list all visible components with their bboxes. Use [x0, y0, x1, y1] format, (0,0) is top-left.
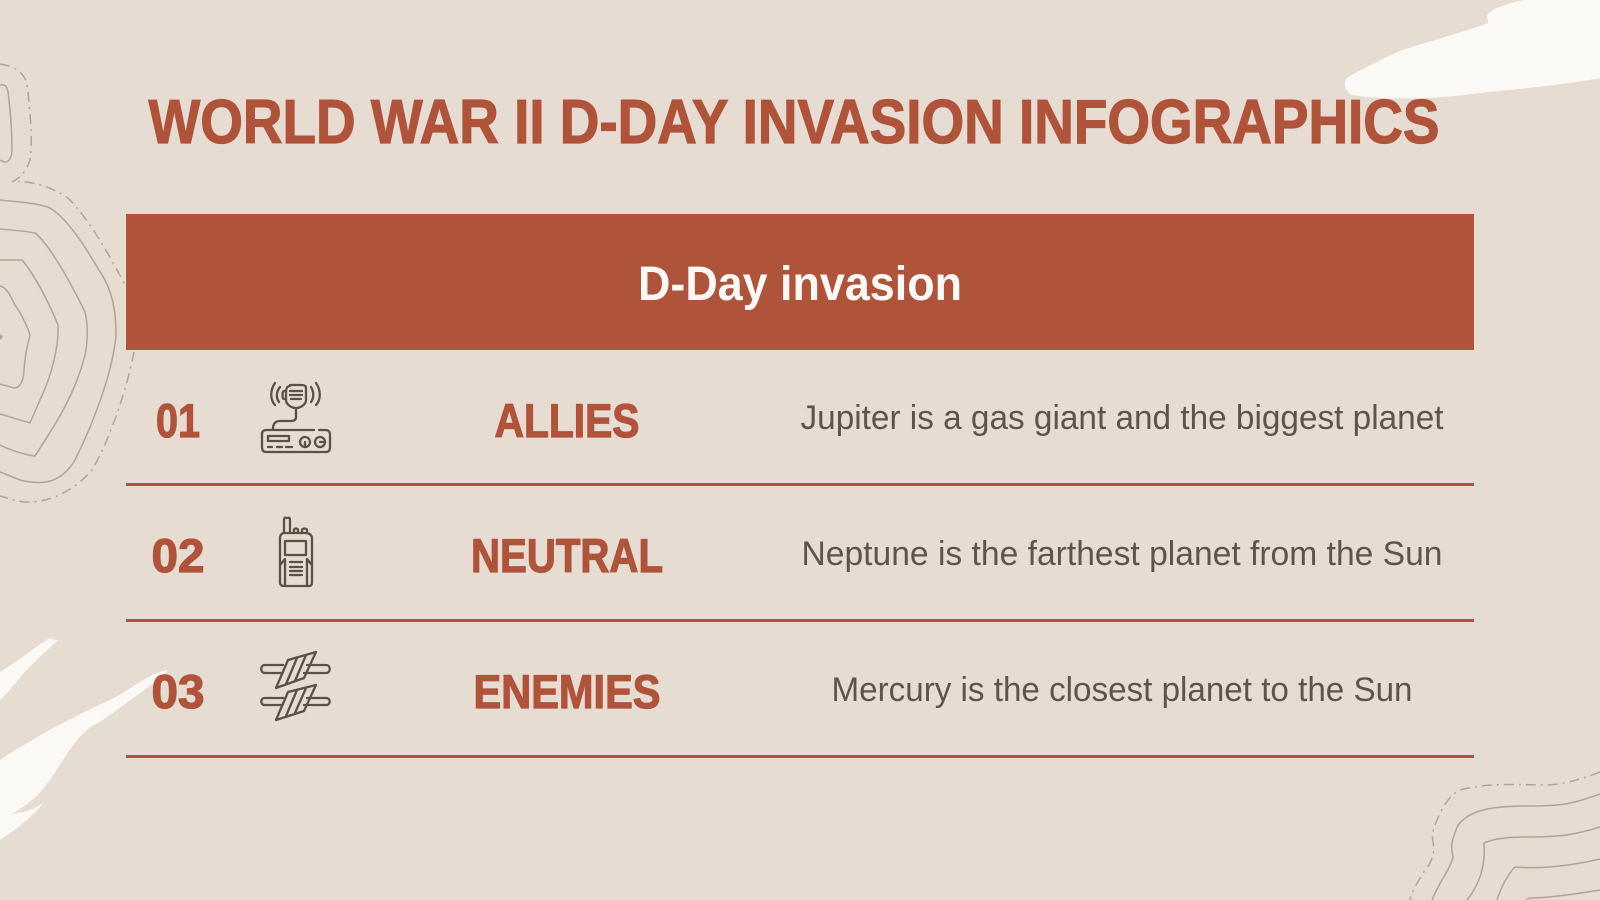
icon: walkie talkie [280, 518, 312, 586]
number 02: 02 [152, 529, 204, 582]
topographic lines: left [0, 64, 134, 502]
brush stroke: top right [1345, 0, 1600, 99]
allies label: ALLIES [494, 394, 640, 447]
header band label: D-Day invasion [638, 258, 962, 311]
row 3: enemies [152, 652, 1412, 720]
neutral label: NEUTRAL [471, 529, 663, 582]
topographic lines: bottom right [1410, 772, 1600, 900]
neutral description: Neptune is the farthest planet from the Sun [802, 535, 1442, 573]
divider 3 [126, 755, 1474, 758]
divider 1 [126, 483, 1474, 486]
number 01: 01 [156, 394, 200, 447]
icon: radio transceiver [262, 383, 330, 452]
number 03: 03 [152, 665, 204, 718]
icon: barbed wire [261, 652, 330, 720]
enemies description: Mercury is the closest planet to the Sun [832, 671, 1412, 709]
row 1: allies [156, 383, 1444, 452]
allies description: Jupiter is a gas giant and the biggest planet [800, 399, 1444, 437]
row 2: neutral [152, 518, 1442, 586]
divider 2 [126, 619, 1474, 622]
brush stroke: bottom left [0, 670, 168, 840]
header band [126, 214, 1474, 350]
title: WORLD WAR II D-DAY INVASION INFOGRAPHICS [148, 88, 1440, 157]
enemies label: ENEMIES [474, 665, 660, 718]
brush stroke: left middle [0, 638, 58, 700]
